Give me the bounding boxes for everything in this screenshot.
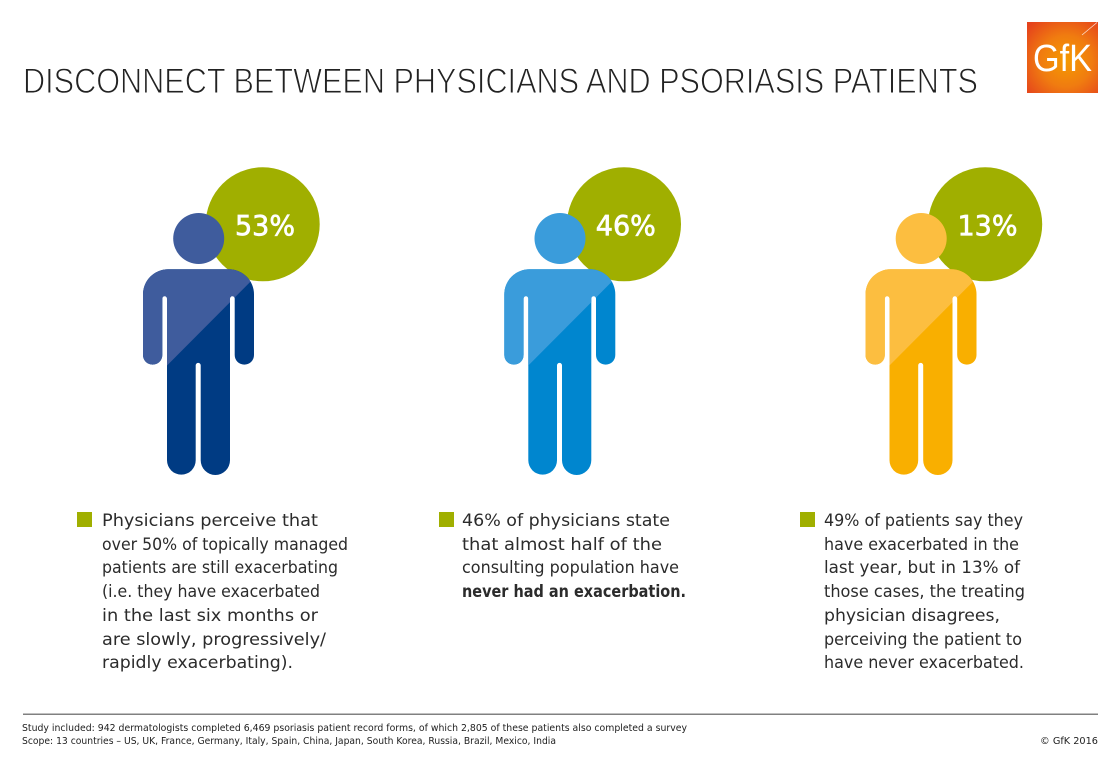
figure: 13% person with callout: 13% [958, 209, 1018, 242]
title: DISCONNECT BETWEEN PHYSICIANS AND PSORIASIS PATIENTS [23, 62, 978, 101]
bullet text block: never had an exacerbation. [462, 582, 686, 602]
panel: physician disagrees 13% [800, 167, 1042, 673]
bullet text block: Physicians perceive that [102, 511, 318, 531]
copyright: © GfK 2016 [1040, 736, 1098, 747]
bullet text block: rapidly exacerbating). [102, 653, 293, 673]
bullet text block: (i.e. they have exacerbated [102, 582, 320, 602]
bullet text block: perceiving the patient to [824, 630, 1022, 650]
bullet text block: over 50% of topically managed [102, 535, 348, 555]
bullet text block: 46% of physicians state [462, 511, 670, 531]
bullet text block: have never exacerbated. [824, 653, 1024, 673]
panel: physicians exacerbating 53% [77, 167, 348, 673]
figure: 46% person with callout [504, 167, 681, 475]
footer notes [22, 723, 687, 747]
figure: 53% person with callout: 53% [235, 209, 295, 242]
icon: GfK logo [1027, 22, 1098, 93]
bullet text block [800, 511, 1025, 673]
panel: never exacerbated 46% [439, 167, 686, 602]
footer notes: Study included: 942 dermatologists completed 6,469 psoriasis patient record forms, of which 2,805 of these patients also completed a survey [22, 723, 687, 734]
bullet text block: last year, but in 13% of [824, 558, 1021, 578]
bullet text block: that almost half of the [462, 535, 662, 555]
footer notes: Scope: 13 countries – US, UK, France, Germany, Italy, Spain, China, Japan, South Korea, Russia, Brazil, Mexico, India [22, 736, 556, 747]
bullet text block: 49% of patients say they [824, 511, 1023, 531]
bullet text block [77, 511, 348, 673]
figure: 46% person with callout: 46% [596, 209, 656, 242]
figure: 53% person with callout [143, 167, 320, 475]
bullet text block: physician disagrees, [824, 606, 1000, 626]
bullet text block: patients are still exacerbating [102, 558, 338, 578]
figure: 13% person with callout [866, 167, 1042, 475]
bullet text block: are slowly, progressively/ [102, 630, 326, 650]
bullet text block: consulting population have [462, 558, 679, 578]
bullet text block: have exacerbated in the [824, 535, 1019, 555]
icon: GfK logo: GfK [1033, 38, 1092, 80]
bullet text block [439, 511, 686, 602]
bullet text block: those cases, the treating [824, 582, 1025, 602]
bullet text block: in the last six months or [102, 606, 318, 626]
